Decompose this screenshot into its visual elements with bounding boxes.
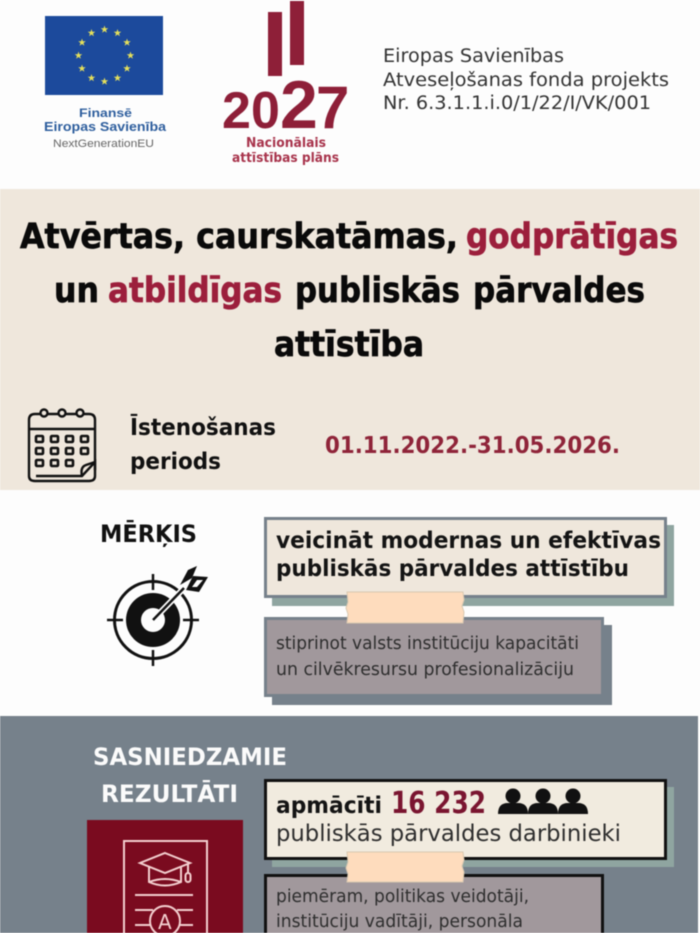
- text: implementation period label: [130, 413, 276, 475]
- callout: trained employees: apmācīti: [276, 793, 382, 819]
- text: project reference: Eiropas Savienības: [383, 46, 564, 67]
- title: attīstība: [274, 325, 424, 365]
- callout: employee examples: [266, 876, 602, 933]
- text: EU funding label: NextGenerationEU: [53, 138, 154, 150]
- icon: diploma on maroon tile: [87, 820, 243, 933]
- logo: National Development Plan 2027: Nacionālais: [246, 136, 326, 151]
- logo: National Development Plan 2027: 2: [280, 67, 318, 143]
- text: employee description: publiskās pārvaldes darbinieki: [276, 821, 621, 847]
- callout: supporting goal: [266, 618, 612, 705]
- panel: goal: [0, 490, 700, 716]
- tape: results connector: [346, 852, 464, 882]
- title: pārvaldes: [473, 271, 645, 311]
- text: EU funding label: [44, 106, 167, 150]
- heading: goal: MĒRĶIS: [100, 519, 197, 548]
- title: atbildīgas: [108, 271, 282, 311]
- callout: main goal: [266, 518, 674, 606]
- number: trained employees: 16 232: [391, 786, 486, 821]
- text: project reference: Nr. 6.3.1.1.i.0/1/22/I/VK/001: [383, 93, 651, 114]
- text: implementation dates: 01.11.2022.-31.05.2026.: [325, 433, 620, 459]
- panel: title and period: [0, 189, 700, 490]
- title: publiskās: [295, 271, 460, 311]
- logo: National Development Plan 2027: [222, 1, 349, 166]
- logo: National Development Plan 2027: attīstības plāns: [232, 151, 339, 166]
- title: un: [54, 271, 99, 311]
- text: project reference: [383, 46, 669, 114]
- icon: target with arrow: [107, 566, 208, 666]
- callout: main goal: veicināt modernas un efektīvas: [276, 528, 661, 554]
- text: project reference: Atveseļošanas fonda projekts: [383, 70, 669, 91]
- title: godprātīgas: [466, 217, 678, 257]
- callout: employee examples: institūciju vadītāji, personāla: [276, 911, 523, 932]
- tape: goal connector: [346, 592, 464, 623]
- logo: EU flag: [45, 16, 163, 95]
- icon: three people: [498, 788, 588, 814]
- callout: supporting goal: un cilvēkresursu profesionalizāciju: [276, 659, 574, 680]
- text: EU funding label: Eiropas Savienība: [44, 120, 167, 134]
- title: [20, 217, 678, 365]
- heading: expected results: SASNIEDZAMIE: [93, 743, 287, 771]
- logo: National Development Plan 2027: 20: [222, 82, 280, 140]
- title: Atvērtas, caurskatāmas,: [20, 217, 458, 257]
- text: EU funding label: Finansē: [79, 106, 132, 120]
- callout: trained employees: [266, 780, 674, 867]
- text: implementation period label: Īstenošanas: [130, 413, 276, 441]
- panel: header logos: [44, 1, 669, 166]
- callout: main goal: publiskās pārvaldes attīstību: [276, 556, 629, 582]
- callout: employee examples: piemēram, politikas veidotāji,: [276, 886, 529, 907]
- icon: calendar: [29, 410, 95, 481]
- callout: supporting goal: stiprinot valsts institūciju kapacitāti: [276, 633, 579, 654]
- logo: National Development Plan 2027: 7: [316, 74, 349, 141]
- text: implementation period label: periods: [130, 449, 221, 475]
- heading: expected results: REZULTĀTI: [101, 779, 238, 808]
- panel: expected results: [0, 716, 698, 933]
- heading: expected results: [93, 743, 287, 808]
